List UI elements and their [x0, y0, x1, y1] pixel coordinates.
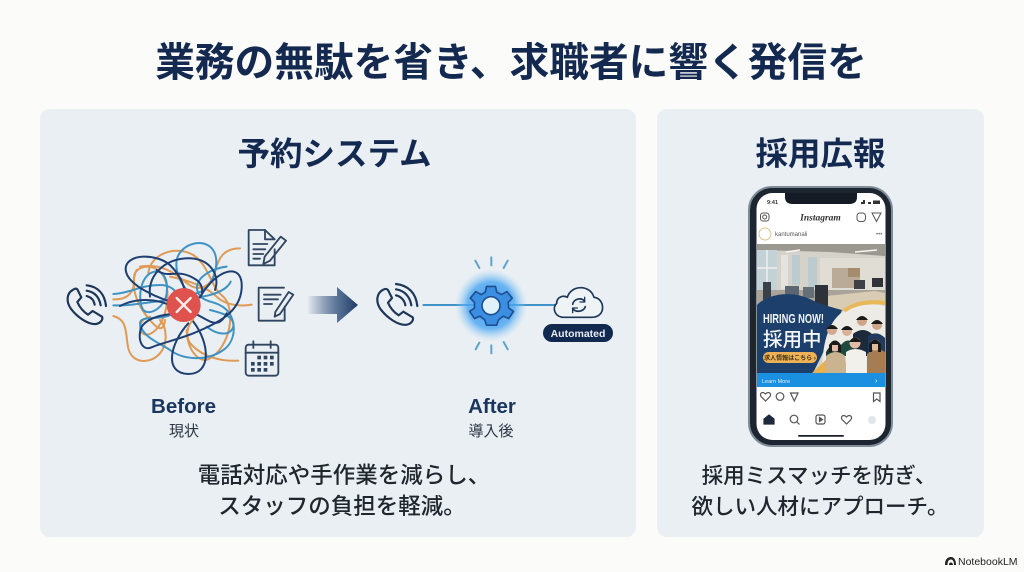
learn more bar [757, 373, 885, 387]
profile row [759, 228, 882, 240]
phone mockup [749, 187, 892, 446]
label: before: 現状 [169, 423, 199, 440]
icon: rays [475, 257, 508, 353]
tangled lines [113, 243, 252, 374]
post image: office [757, 244, 885, 373]
phone screen [756, 193, 886, 440]
text: recruiting description [692, 464, 948, 519]
banner: button [763, 352, 817, 363]
panel background: reservation system [40, 109, 636, 537]
notch [785, 193, 857, 204]
profile row: kantumanali [775, 232, 807, 238]
badge: automated: Automated [551, 328, 605, 340]
after diagram [377, 257, 603, 353]
text: recruiting description: 採用ミスマッチを防ぎ、 [702, 464, 936, 488]
post image: office: 採用中 [763, 329, 822, 351]
phone mockup: › [875, 378, 878, 385]
app header [760, 213, 881, 224]
banner: hiring text: HIRING NOW! [763, 311, 824, 326]
heading: reservation system: 予約システム [237, 136, 432, 172]
heading: recruiting PR: 採用広報 [755, 136, 886, 172]
before diagram [68, 230, 293, 376]
app header: Instagram [799, 214, 841, 224]
arrow: before to after [307, 287, 358, 323]
action icons [760, 393, 880, 402]
text: reservation description: スタッフの負担を軽減。 [218, 494, 466, 519]
icon: cloud sync [554, 288, 603, 317]
panel background: recruiting PR [657, 109, 984, 537]
icon: memo with pen [259, 288, 293, 321]
profile row: ••• [876, 232, 882, 238]
logo: NotebookLM: NotebookLM [958, 556, 1018, 568]
label: before [151, 395, 216, 440]
panel: reservation system [40, 109, 636, 537]
icon: red x mark [167, 288, 201, 322]
connector line [423, 302, 557, 308]
icon: phone before [68, 285, 106, 324]
title: 業務の無駄を省き、求職者に響く発信を [155, 41, 867, 85]
banner: navy shape [757, 294, 842, 373]
text: reservation description: 電話対応や手作業を減らし、 [198, 463, 490, 488]
navigation bar [764, 415, 876, 424]
phone mockup: Learn More [762, 379, 790, 385]
panel: recruiting PR [657, 109, 984, 537]
text: recruiting description: 欲しい人材にアプローチ。 [692, 495, 948, 519]
icon: phone after [377, 284, 417, 325]
banner: team photo [812, 300, 885, 373]
icon: glowing gear [455, 269, 527, 341]
label: after: After [468, 395, 516, 418]
status bar: 9:41 [767, 200, 778, 206]
label: after [468, 395, 516, 440]
label: after: 導入後 [468, 423, 514, 440]
text: reservation description [198, 463, 490, 519]
icon: calendar [246, 341, 278, 376]
home indicator [798, 435, 844, 437]
post image: office: 求人情報はこちら › [764, 354, 816, 362]
icon: document with pen [249, 230, 286, 265]
phone body [749, 187, 892, 446]
label: before: Before [151, 395, 216, 418]
badge: automated [543, 324, 613, 342]
